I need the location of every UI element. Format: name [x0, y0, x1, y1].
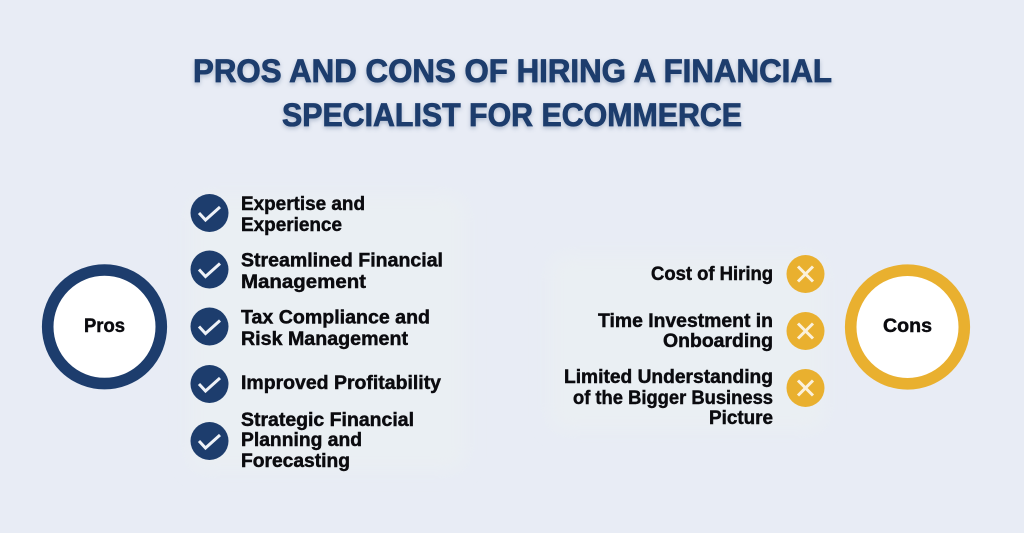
pro item: expertise: Experience [241, 215, 342, 236]
con item: cost: Cost of Hiring [651, 264, 773, 285]
title [193, 53, 832, 133]
title: PROS AND CONS OF HIRING A FINANCIAL [193, 53, 832, 89]
pro item: streamlined management [190, 250, 443, 293]
panel: cons circle: Cons [883, 316, 932, 337]
con item: limited understanding [564, 367, 824, 429]
pro item: profitability [190, 365, 441, 403]
panel: cons list [564, 255, 824, 429]
con item: time investment: Onboarding [663, 331, 773, 352]
title: SPECIALIST FOR ECOMMERCE [282, 97, 742, 133]
pro item: streamlined management: Management [241, 272, 367, 293]
pro item: strategic planning: Forecasting [241, 451, 350, 472]
pro item: strategic planning: Strategic Financial [241, 410, 414, 431]
pro item: expertise [190, 194, 365, 236]
panel: pros list [190, 194, 443, 472]
pro item: tax compliance: Tax Compliance and [241, 308, 430, 328]
con item: cost [651, 255, 824, 293]
pro item: expertise: Expertise and [241, 194, 365, 215]
pro item: tax compliance: Risk Management [241, 329, 409, 350]
panel: pros circle [48, 270, 161, 384]
pro item: tax compliance [190, 308, 430, 350]
pro item: profitability: Improved Profitability [241, 373, 441, 394]
con item: limited understanding: Picture [709, 408, 773, 429]
pro item: streamlined management: Streamlined Financial [241, 250, 443, 272]
con item: time investment: Time Investment in [598, 311, 773, 332]
pro item: strategic planning [190, 410, 414, 472]
con item: limited understanding: of the Bigger Business [573, 388, 773, 409]
panel: cons circle [851, 270, 964, 384]
pro item: strategic planning: Planning and [241, 430, 362, 451]
panel: pros circle: Pros [84, 316, 125, 337]
con item: time investment [598, 311, 824, 352]
con item: limited understanding: Limited Understanding [564, 367, 773, 388]
